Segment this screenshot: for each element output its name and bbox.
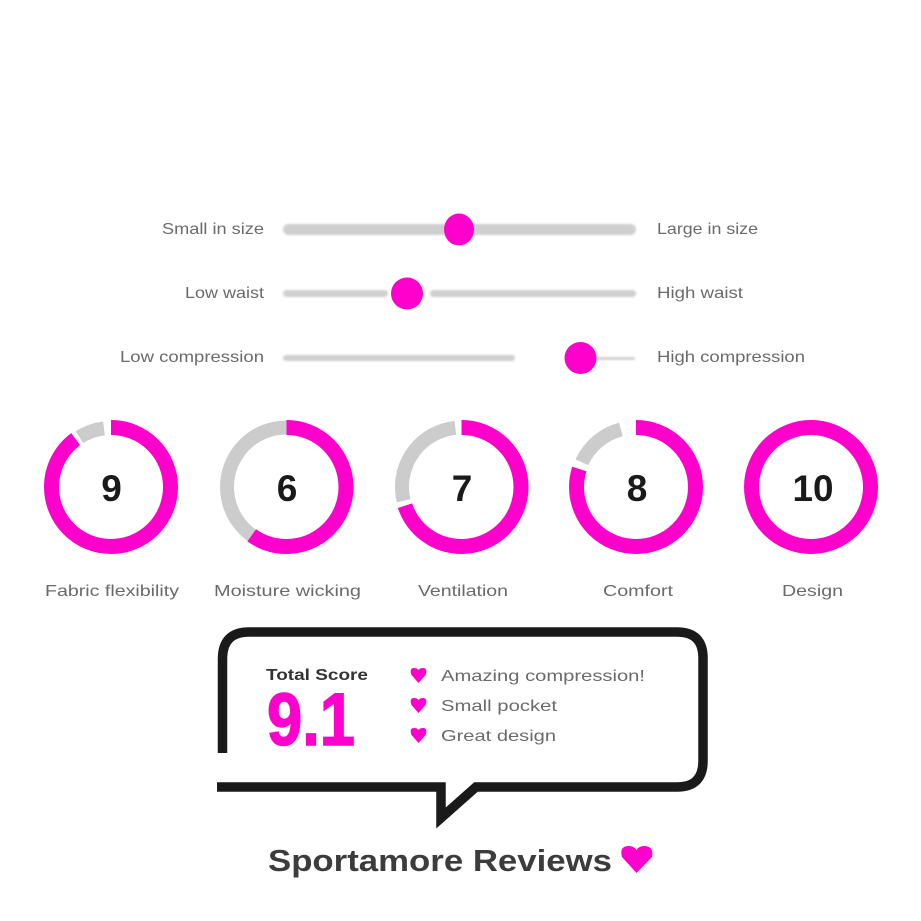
gauge: Moisture wicking (214, 428, 361, 600)
slider: waist (185, 278, 744, 310)
review highlights: Amazing compression! (441, 668, 645, 685)
slider: compression: Low compression (120, 349, 264, 366)
icon: heart (621, 846, 652, 873)
gauge: Comfort: 8 (627, 468, 647, 509)
icon: heart (411, 698, 426, 713)
gauge: Ventilation: Ventilation (418, 583, 508, 600)
slider: size: Small in size (162, 221, 264, 238)
slider: waist: High waist (657, 285, 744, 302)
gauge: Moisture wicking: 6 (277, 468, 297, 509)
gauge: Fabric flexibility (30, 406, 192, 600)
review highlights: Great design (441, 728, 556, 745)
slider: compression (120, 342, 805, 374)
speech bubble (217, 632, 703, 818)
review highlights: Small pocket (441, 698, 558, 715)
total score: Total Score (266, 667, 368, 684)
gauge: Fabric flexibility: 9 (101, 468, 122, 509)
icon: heart (411, 668, 426, 683)
gauge: Design (752, 428, 870, 600)
slider: size: Large in size (657, 221, 758, 238)
gauge: Moisture wicking: Moisture wicking (214, 583, 361, 600)
review highlights (411, 668, 645, 745)
slider: waist: Low waist (185, 285, 265, 302)
gauge: Design: 10 (792, 468, 834, 509)
gauge: Ventilation (390, 416, 533, 600)
slider: compression: High compression (657, 349, 805, 366)
icon: heart (411, 728, 426, 743)
gauge: Design: Design (782, 583, 843, 600)
total score: 9.1 (267, 678, 355, 761)
gauge: Ventilation: 7 (452, 468, 472, 509)
brand footer: Sportamore Reviews (268, 843, 612, 878)
gauge: Comfort (557, 408, 715, 600)
gauge: Comfort: Comfort (603, 583, 674, 600)
slider: size (162, 214, 758, 246)
gauge: Fabric flexibility: Fabric flexibility (45, 583, 179, 600)
